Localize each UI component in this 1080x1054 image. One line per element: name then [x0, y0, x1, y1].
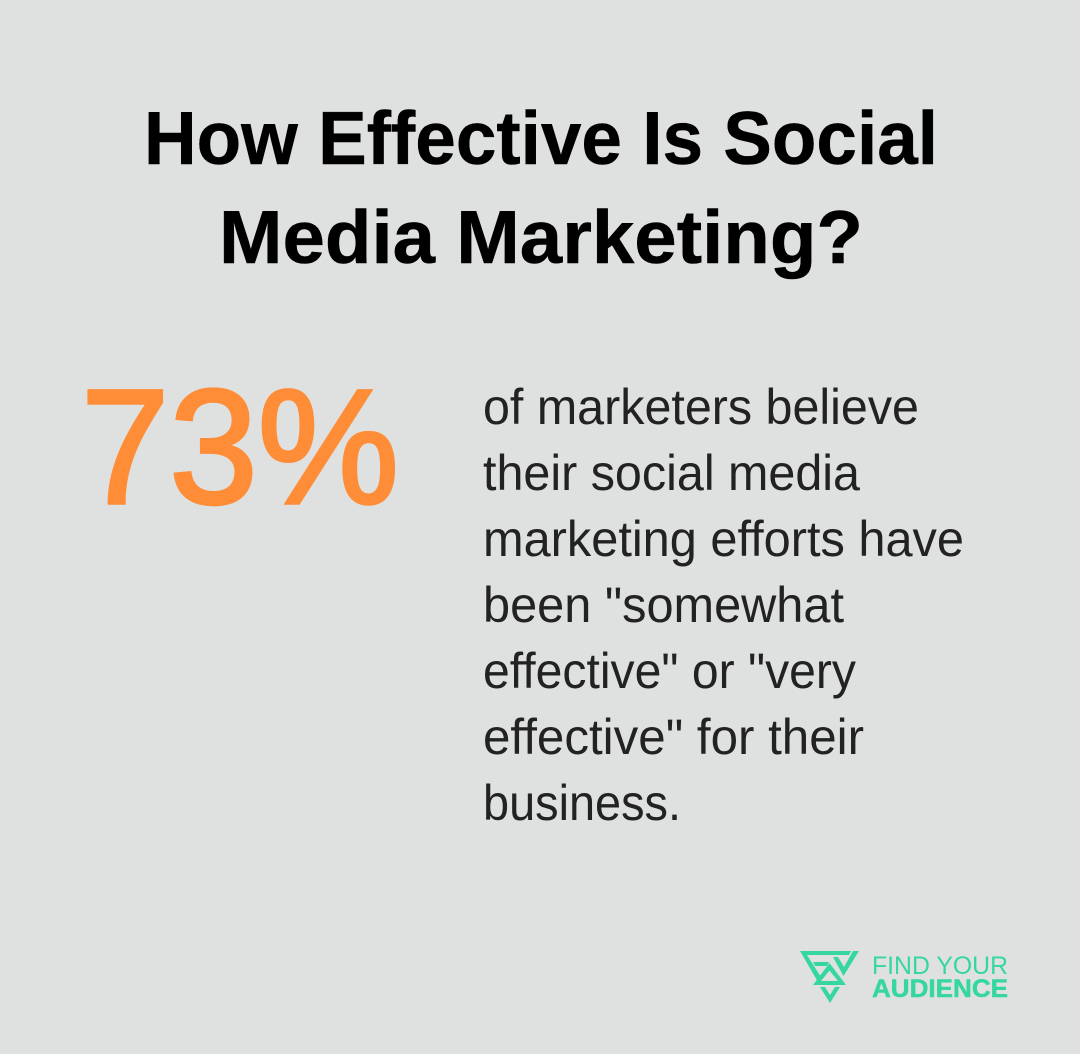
title: How Effective Is Social	[144, 96, 938, 180]
description text: of marketers believe	[483, 379, 919, 435]
icon: triangle logo mark	[800, 951, 859, 1003]
description text: their social media	[483, 445, 860, 501]
title: Media Marketing?	[219, 195, 863, 279]
logo wordmark: FIND YOUR	[872, 952, 1008, 980]
description text: effective" or "very	[483, 643, 856, 699]
description text: effective" for their	[483, 709, 864, 765]
logo wordmark: AUDIENCE	[872, 975, 1008, 1003]
statistic: 73%: 73%	[81, 355, 399, 538]
title	[144, 96, 938, 279]
description text: marketing efforts have	[483, 511, 964, 567]
logo wordmark	[872, 952, 1008, 1003]
description text: business.	[483, 775, 681, 831]
description text	[483, 379, 964, 831]
logo: Find Your Audience	[800, 951, 1008, 1003]
description text: been "somewhat	[483, 577, 844, 633]
